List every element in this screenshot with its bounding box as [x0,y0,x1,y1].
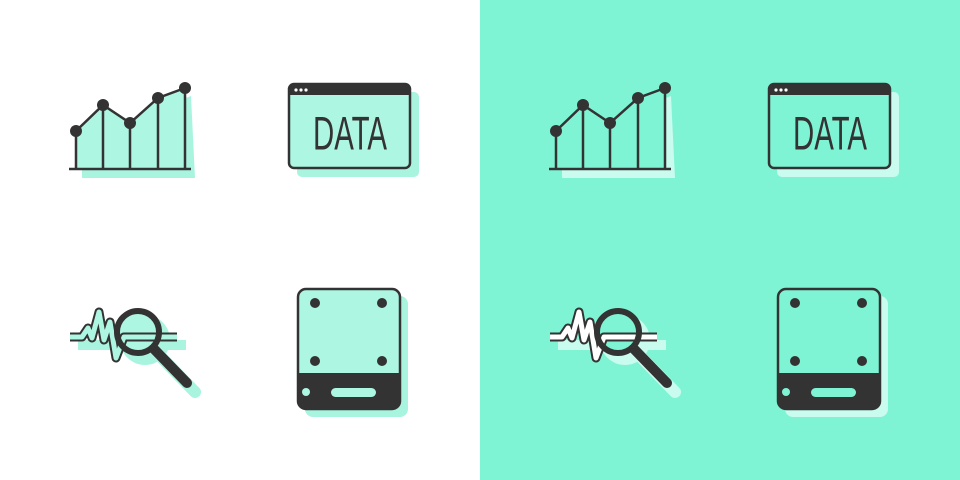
icon: line chart [549,82,675,178]
icon: magnifier with pulse [550,311,675,392]
icon: browser DATA: DATA [313,108,387,161]
icon: magnifier with pulse [70,311,195,392]
icon set: left panel [69,82,419,417]
icon: browser DATA [289,84,419,177]
icon: hard drive [778,289,888,417]
icon: browser DATA [769,84,899,177]
icon: hard drive [298,289,408,417]
panel: mint background [480,0,960,480]
icon set: right panel [549,82,899,417]
icon: line chart [69,82,195,178]
icon: browser DATA: DATA [793,108,867,161]
